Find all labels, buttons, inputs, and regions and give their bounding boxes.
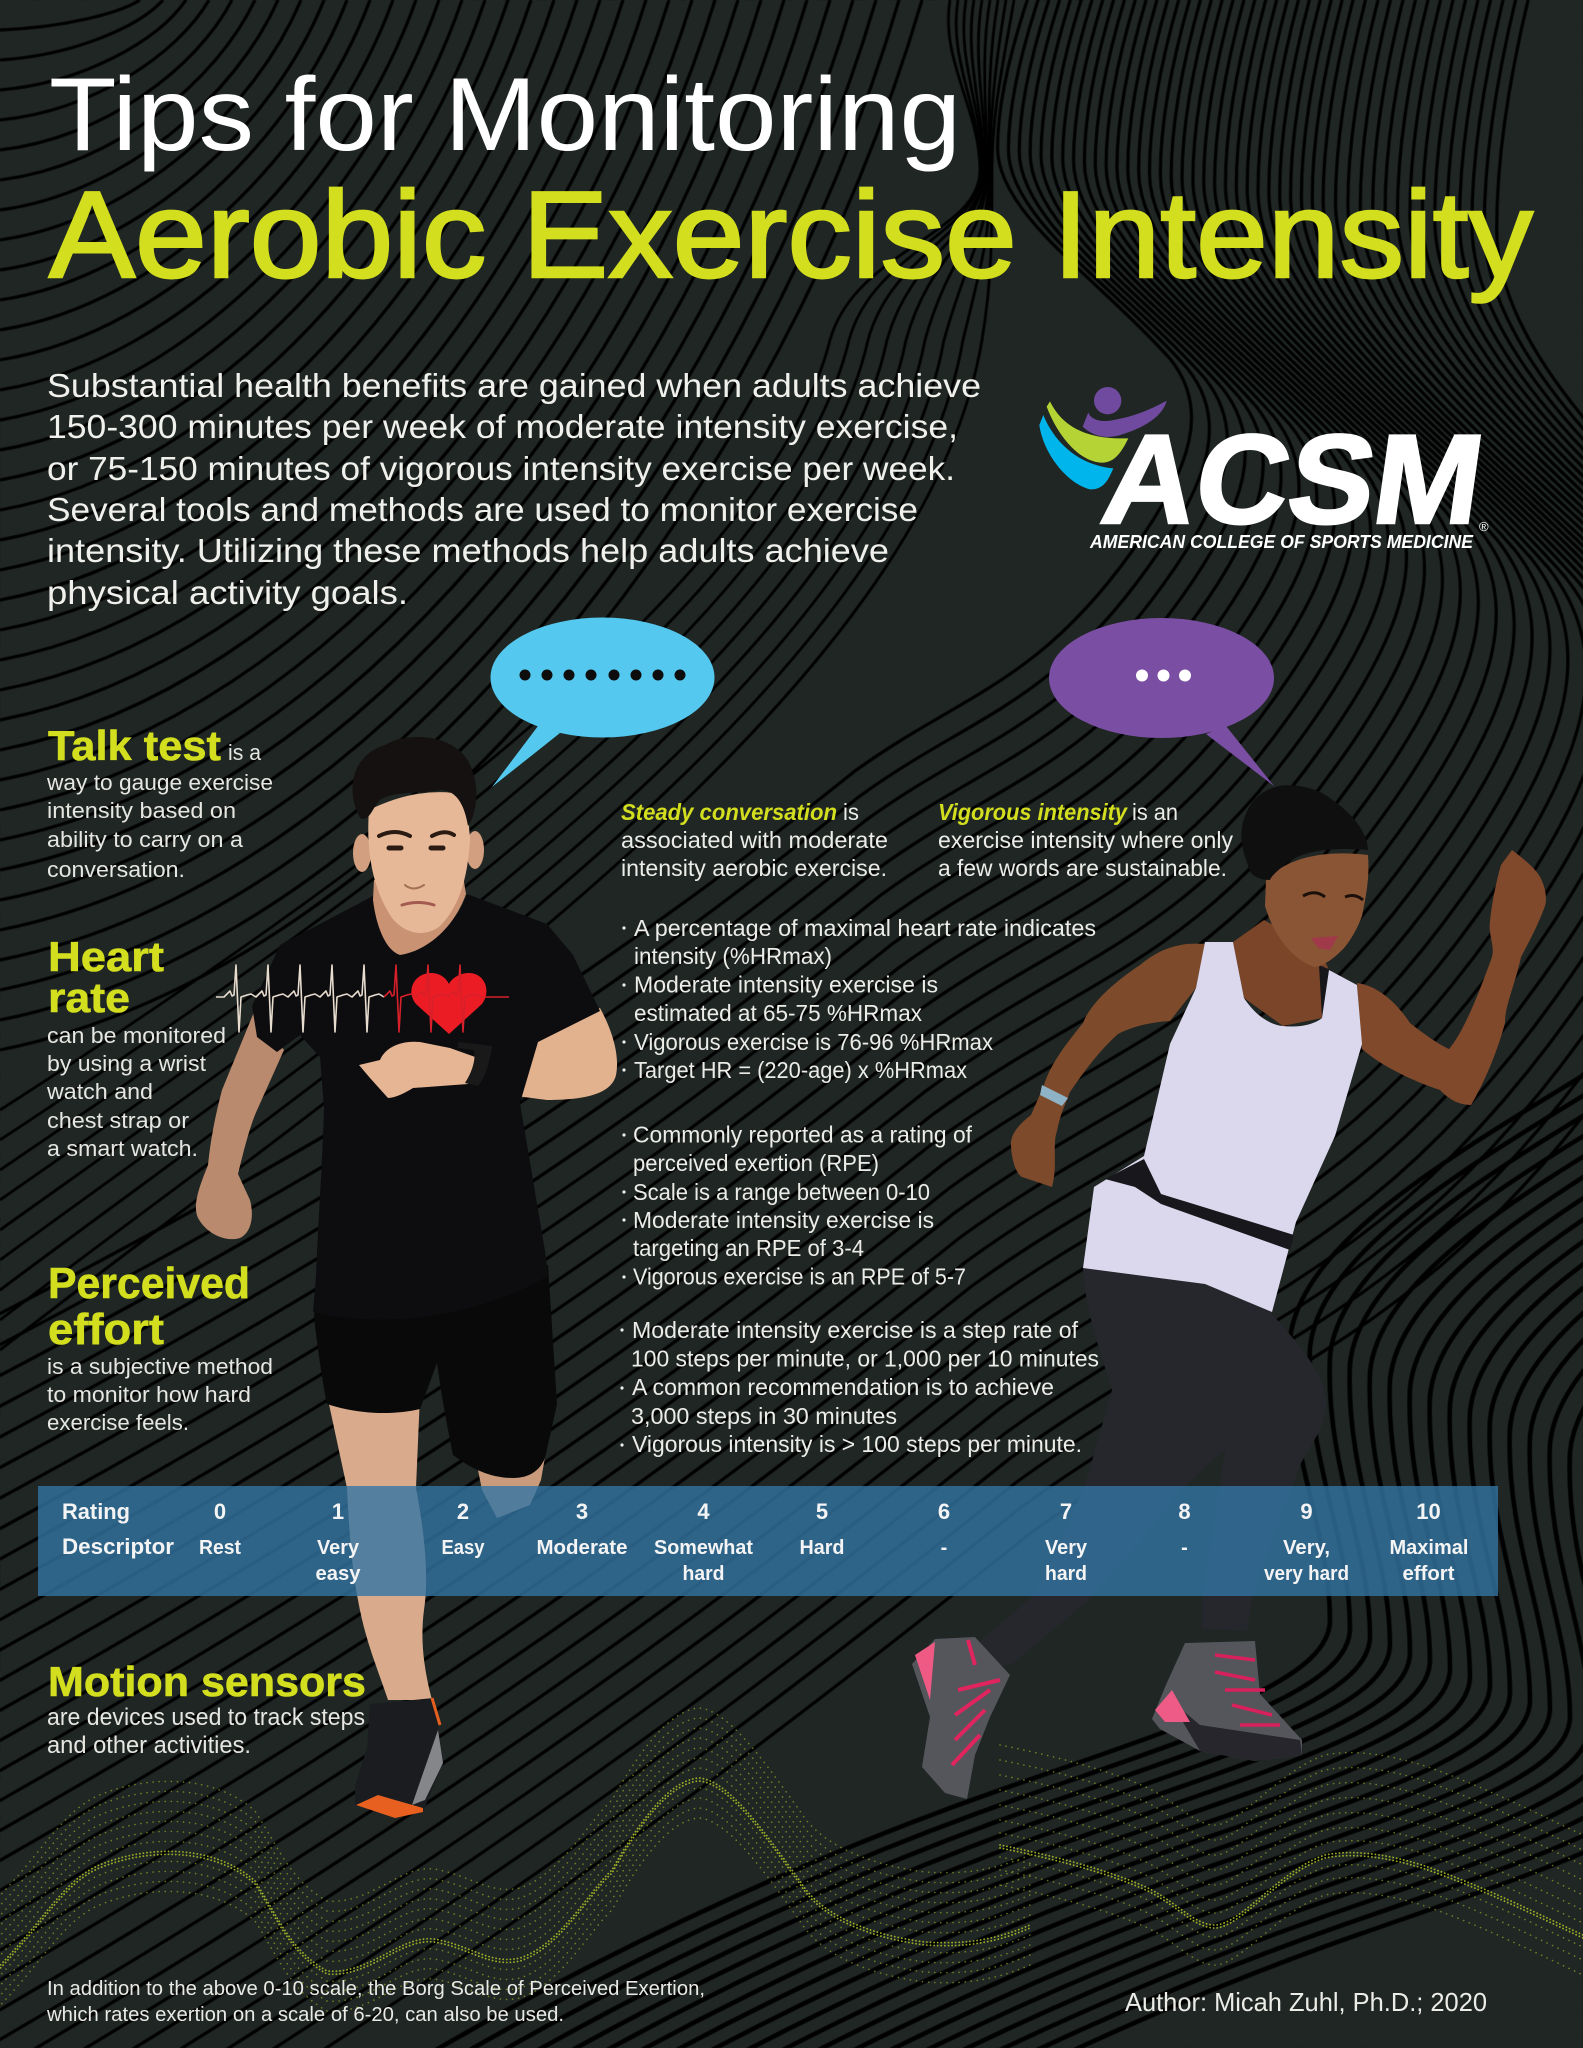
text: vigorous intensity: Vigorous intensity bbox=[938, 799, 1128, 825]
bullets: perceived exertion: perceived exertion (RPE) bbox=[633, 1150, 879, 1176]
hand and fist bbox=[359, 1042, 478, 1098]
bullets: heart rate: Target HR = (220-age) x %HRmax bbox=[634, 1057, 967, 1083]
intro paragraph: or 75-150 minutes of vigorous intensity exercise per week. bbox=[47, 450, 955, 487]
right arm bbox=[1357, 850, 1546, 1105]
left arm bbox=[1011, 944, 1205, 1187]
text: vigorous intensity: a few words are sustainable. bbox=[938, 855, 1227, 881]
descriptors: - bbox=[1181, 1537, 1188, 1559]
descriptors: Rest bbox=[199, 1537, 241, 1559]
rating table band bbox=[38, 1486, 1498, 1596]
bullets: heart rate: Moderate intensity exercise is bbox=[634, 972, 938, 998]
descriptors: Very, bbox=[1283, 1537, 1330, 1559]
facial features bbox=[379, 832, 454, 905]
heartbeat line bbox=[216, 965, 509, 1032]
front leg bbox=[327, 1395, 432, 1700]
intro paragraph: 150-300 minutes per week of moderate intensity exercise, bbox=[47, 408, 958, 445]
footnote: In addition to the above 0-10 scale, the Borg Scale of Perceived Exertion, bbox=[47, 1978, 705, 2000]
text: perceived effort: effort bbox=[48, 1305, 164, 1354]
descriptors bbox=[199, 1537, 1468, 1585]
descriptors: Maximal bbox=[1390, 1537, 1468, 1559]
bullets: heart rate bbox=[622, 915, 1096, 1083]
bullets: steps: 100 steps per minute, or 1,000 per 10 minutes bbox=[631, 1346, 1099, 1372]
rating numbers: 6 bbox=[938, 1499, 950, 1524]
intro paragraph: Several tools and methods are used to monitor exercise bbox=[47, 491, 918, 528]
descriptors: easy bbox=[316, 1563, 361, 1585]
text: vigorous intensity bbox=[938, 799, 1233, 881]
text: vigorous intensity: is an bbox=[1132, 799, 1178, 825]
rating numbers: 1 bbox=[332, 1499, 344, 1524]
text: heart rate: a smart watch. bbox=[47, 1136, 198, 1161]
bullets: heart rate: estimated at 65-75 %HRmax bbox=[634, 1000, 922, 1026]
descriptors: Somewhat bbox=[654, 1537, 753, 1559]
figure: female runner bbox=[912, 785, 1546, 1799]
title: Tips for Monitoring bbox=[49, 57, 961, 173]
rating numbers: 9 bbox=[1300, 1499, 1313, 1524]
text: steady conversation: associated with moderate bbox=[621, 827, 888, 853]
face bbox=[1265, 853, 1368, 967]
tank top bbox=[1083, 942, 1362, 1312]
watch bbox=[458, 1042, 492, 1086]
hair bbox=[352, 737, 476, 826]
text: motion sensors bbox=[47, 1658, 366, 1759]
text: steady conversation: intensity aerobic exercise. bbox=[621, 855, 887, 881]
rating numbers: 7 bbox=[1060, 1499, 1072, 1524]
descriptors: Hard bbox=[800, 1537, 844, 1559]
descriptors: very hard bbox=[1264, 1563, 1349, 1585]
rating numbers: 8 bbox=[1178, 1499, 1191, 1524]
text: vigorous intensity: exercise intensity where only bbox=[938, 827, 1233, 853]
bullets: perceived exertion: Moderate intensity exercise is bbox=[633, 1207, 934, 1233]
hair bbox=[1241, 785, 1368, 880]
chest and neck bbox=[1233, 920, 1329, 1026]
left arm bbox=[196, 1012, 284, 1239]
intro paragraph: Substantial health benefits are gained when adults achieve bbox=[47, 367, 981, 404]
text: talk test: intensity based on bbox=[47, 798, 236, 823]
descriptors: - bbox=[941, 1537, 947, 1559]
text: heart rate: watch and bbox=[46, 1079, 153, 1104]
watch bbox=[1040, 1085, 1068, 1106]
footnote bbox=[46, 1978, 705, 2026]
back shoe bbox=[912, 1637, 1010, 1799]
row headers: Descriptor bbox=[62, 1534, 174, 1559]
bullets: perceived exertion: Vigorous exercise is an RPE of 5-7 bbox=[633, 1264, 966, 1290]
text: heart rate: rate bbox=[48, 974, 130, 1021]
footnote: which rates exertion on a scale of 6-20, can also be used. bbox=[46, 2004, 564, 2026]
descriptors: Moderate bbox=[536, 1537, 628, 1559]
back lower leg bbox=[472, 1440, 548, 1518]
bullets: steps bbox=[620, 1317, 1099, 1457]
title: Aerobic Exercise Intensity bbox=[49, 167, 1534, 304]
text: perceived effort: exercise feels. bbox=[47, 1410, 189, 1435]
bullets: perceived exertion: Commonly reported as a rating of bbox=[633, 1122, 973, 1148]
rating numbers bbox=[214, 1499, 1441, 1524]
bullets: heart rate: A percentage of maximal heart rate indicates bbox=[634, 915, 1096, 941]
shirt bbox=[252, 894, 600, 1320]
right arm bbox=[470, 1008, 617, 1100]
bullets: perceived exertion: Scale is a range between 0-10 bbox=[633, 1179, 930, 1205]
text: perceived effort bbox=[47, 1259, 273, 1435]
row headers: Rating bbox=[62, 1499, 130, 1524]
heartbeat heart bbox=[411, 973, 486, 1034]
eyes bbox=[1303, 893, 1363, 900]
text: perceived effort: to monitor how hard bbox=[47, 1382, 251, 1407]
ears bbox=[353, 834, 371, 872]
text: perceived effort: Perceived bbox=[48, 1259, 250, 1308]
bullets: steps: Moderate intensity exercise is a step rate of bbox=[632, 1317, 1079, 1343]
intro paragraph: intensity. Utilizing these methods help adults achieve bbox=[47, 532, 889, 569]
dotted wave mesh bbox=[0, 1708, 1583, 2025]
text: steady conversation bbox=[621, 799, 888, 881]
bullets: steps: Vigorous intensity is > 100 steps per minute. bbox=[632, 1431, 1082, 1457]
descriptors: effort bbox=[1402, 1563, 1455, 1585]
bullets: heart rate: intensity (%HRmax) bbox=[634, 943, 832, 969]
speech bubble: vigorous intensity bbox=[1049, 618, 1274, 786]
face bbox=[368, 792, 470, 933]
descriptors: Easy bbox=[442, 1537, 485, 1559]
bullets: perceived exertion: targeting an RPE of 3-4 bbox=[633, 1235, 864, 1261]
text: talk test: is a bbox=[228, 740, 262, 765]
text: steady conversation: is bbox=[843, 799, 859, 825]
intro paragraph: physical activity goals. bbox=[47, 574, 408, 611]
leggings bbox=[980, 1242, 1326, 1669]
text: talk test: ability to carry on a bbox=[47, 827, 244, 852]
title bbox=[49, 57, 1534, 304]
descriptors: Very bbox=[1045, 1537, 1088, 1559]
lips bbox=[1311, 936, 1338, 950]
speech bubble: steady conversation bbox=[490, 618, 714, 787]
text: talk test: way to gauge exercise bbox=[46, 770, 273, 795]
text: heart rate: by using a wrist bbox=[47, 1051, 206, 1076]
descriptors: hard bbox=[682, 1563, 724, 1585]
text: steady conversation: Steady conversation bbox=[621, 799, 837, 825]
sports bra strap bbox=[1319, 965, 1331, 1018]
front shoe bbox=[1152, 1641, 1302, 1761]
author credit: Author: Micah Zuhl, Ph.D.; 2020 bbox=[1125, 1987, 1487, 2017]
row headers bbox=[62, 1499, 174, 1559]
bullets: perceived exertion bbox=[622, 1122, 973, 1290]
text: talk test: conversation. bbox=[47, 857, 185, 882]
text: talk test: Talk test bbox=[48, 722, 221, 769]
figure: male runner bbox=[196, 737, 617, 1818]
rating numbers: 3 bbox=[576, 1499, 588, 1524]
text: talk test bbox=[46, 722, 273, 882]
text: motion sensors: are devices used to track steps bbox=[47, 1704, 365, 1731]
text: motion sensors: Motion sensors bbox=[48, 1658, 366, 1705]
rating numbers: 2 bbox=[457, 1499, 469, 1524]
text: perceived effort: is a subjective method bbox=[47, 1354, 273, 1379]
descriptors: hard bbox=[1045, 1563, 1087, 1585]
bullets: heart rate: Vigorous exercise is 76-96 %HRmax bbox=[634, 1029, 993, 1055]
intro paragraph bbox=[47, 367, 981, 611]
ACSM logo: ® bbox=[1479, 519, 1489, 534]
text: heart rate: can be monitored bbox=[47, 1023, 226, 1048]
bullets: steps: 3,000 steps in 30 minutes bbox=[631, 1403, 897, 1429]
rating numbers: 5 bbox=[816, 1499, 828, 1524]
text: heart rate: Heart bbox=[48, 933, 164, 980]
bullets: steps: A common recommendation is to achieve bbox=[632, 1374, 1054, 1400]
rating numbers: 10 bbox=[1416, 1499, 1441, 1524]
ACSM logo: ACSM bbox=[1094, 409, 1492, 551]
rating numbers: 0 bbox=[214, 1499, 226, 1524]
descriptors: Very bbox=[317, 1537, 360, 1559]
rating numbers: 4 bbox=[697, 1499, 710, 1524]
neck bbox=[373, 870, 466, 955]
text: heart rate: chest strap or bbox=[47, 1108, 189, 1133]
shoe bbox=[355, 1698, 443, 1818]
belt bbox=[1105, 1159, 1294, 1250]
text: heart rate bbox=[46, 933, 226, 1161]
shorts bbox=[314, 1265, 557, 1478]
text: motion sensors: and other activities. bbox=[47, 1732, 251, 1759]
ACSM logo: AMERICAN COLLEGE OF SPORTS MEDICINE bbox=[1089, 531, 1474, 552]
